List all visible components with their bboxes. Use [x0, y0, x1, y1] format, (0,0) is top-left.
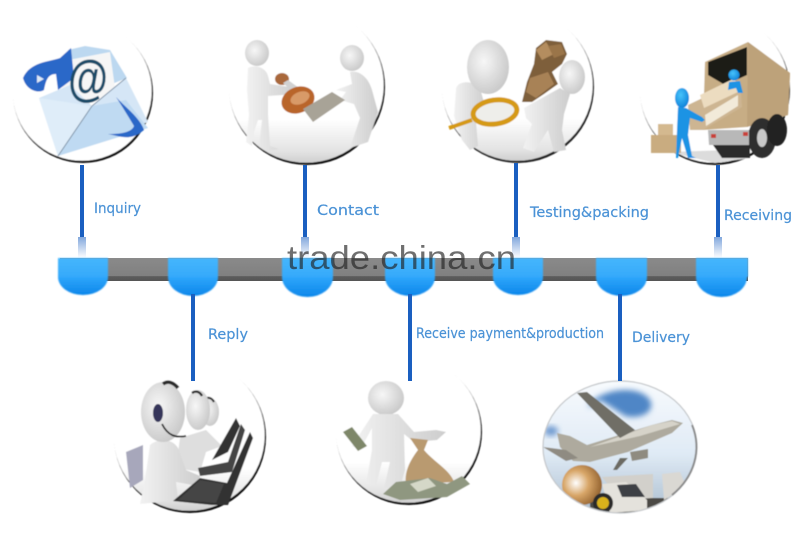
icon: receiving truck — [640, 14, 790, 165]
van ground — [589, 498, 668, 513]
icon: inquiry envelope — [12, 22, 153, 163]
connector: Receive payment and production — [408, 294, 412, 381]
sky patches — [588, 390, 651, 417]
label: Testing&packing: Testing&packing — [529, 205, 649, 221]
at sign: @ — [68, 50, 108, 106]
timeline node 7 — [696, 258, 748, 297]
left figure — [245, 40, 296, 151]
icon: testing and packing figures — [441, 10, 594, 163]
timeline node 3 — [282, 258, 333, 297]
icon: reply call centre figures — [114, 360, 266, 513]
stamp — [275, 73, 319, 118]
connector: Contact — [301, 165, 309, 258]
timeline node 1 — [58, 258, 108, 295]
front laptop — [173, 432, 253, 505]
timeline node 5 — [493, 258, 543, 295]
right figure — [336, 45, 378, 148]
label: Receive payment&production: Receive payment&production — [416, 326, 604, 342]
truck — [602, 472, 686, 513]
connector: Delivery — [618, 294, 622, 381]
timeline node 2 — [168, 258, 218, 296]
cash pile — [383, 476, 470, 500]
magnifying glass — [449, 97, 518, 128]
sofa — [688, 80, 742, 130]
figure — [352, 381, 446, 488]
front operator — [140, 382, 200, 504]
icon: contact figures with stamp — [228, 8, 385, 165]
connector: Inquiry — [78, 165, 86, 258]
money bag — [406, 438, 454, 484]
cash in hand — [343, 427, 367, 451]
connector: Testing and packing — [512, 163, 520, 258]
globe — [562, 465, 602, 505]
connector: Receiving — [714, 165, 722, 258]
timeline bar — [60, 258, 748, 281]
connector: Reply — [191, 294, 195, 381]
label: Reply: Reply — [208, 327, 248, 343]
screen behind — [126, 445, 143, 488]
label: Delivery: Delivery — [632, 330, 690, 346]
back operators — [176, 390, 245, 476]
label: Receiving: Receiving — [724, 208, 792, 224]
carrier figure — [523, 60, 585, 152]
wheel badge — [593, 493, 613, 513]
label: Inquiry: Inquiry — [94, 201, 141, 217]
watermark: trade.china.cn — [287, 239, 516, 276]
icon: delivery plane, globe and truck — [540, 380, 700, 515]
label: Contact: Contact — [317, 203, 379, 219]
blue worker on ground — [675, 88, 705, 158]
blue worker in truck — [728, 70, 743, 93]
cardboard boxes — [651, 124, 681, 153]
timeline node 6 — [596, 258, 647, 296]
plane — [543, 392, 683, 470]
inspector figure — [454, 40, 509, 150]
truck container — [703, 42, 790, 158]
boxes — [522, 40, 567, 102]
timeline node 4 — [385, 258, 435, 296]
icon: payment figure with money bag — [336, 358, 482, 505]
paper — [303, 92, 345, 122]
